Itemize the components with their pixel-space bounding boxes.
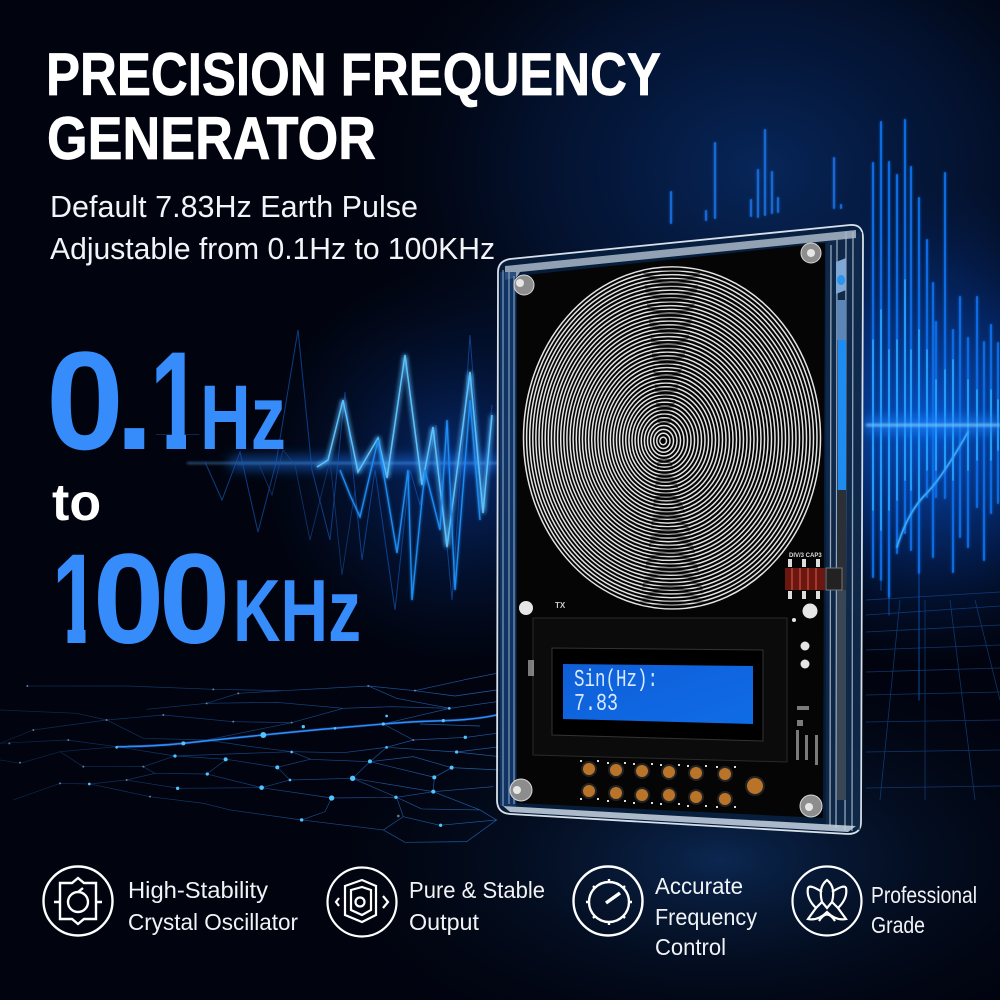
title bbox=[46, 41, 661, 172]
label bbox=[871, 882, 977, 938]
coil centre bbox=[660, 438, 666, 444]
subtitle bbox=[50, 189, 495, 266]
LCD text: Sin(Hz): bbox=[574, 667, 658, 694]
label bbox=[655, 873, 757, 960]
range value: 0.1Hz: 1 bbox=[150, 322, 202, 479]
coil moire hourglass bbox=[640, 267, 705, 608]
icon: flower bbox=[792, 866, 862, 936]
silkscreen TX: TX bbox=[555, 601, 566, 610]
title: PRECISION FREQUENCY bbox=[46, 41, 661, 108]
label: Control bbox=[655, 934, 726, 960]
range value: 100KHz: KHz bbox=[233, 561, 361, 660]
feature: professional grade bbox=[792, 866, 977, 938]
range word: to: to bbox=[52, 474, 101, 532]
label: High-Stability bbox=[128, 877, 268, 903]
label bbox=[409, 877, 545, 935]
LCD module bbox=[533, 618, 787, 762]
feature: accurate frequency control bbox=[574, 866, 757, 960]
range value: 100KHz: 1 bbox=[52, 528, 100, 671]
range value: 100KHz: 0 bbox=[159, 528, 230, 671]
LCD module: 7.83 bbox=[574, 691, 618, 718]
acrylic outer case bbox=[497, 225, 863, 834]
label bbox=[128, 877, 298, 935]
mount holes bbox=[519, 601, 818, 668]
subtitle: Default 7.83Hz Earth Pulse bbox=[50, 189, 418, 224]
right floor grid bbox=[866, 592, 1000, 800]
range value: 0.1Hz bbox=[52, 351, 284, 450]
red toroid component: DIV/3 CAP3 bbox=[789, 553, 822, 559]
right waveform bars bbox=[671, 120, 1000, 700]
icon: crystal bbox=[44, 866, 112, 936]
label: Output bbox=[409, 909, 479, 935]
feature: pure and stable output bbox=[328, 868, 545, 936]
acrylic left rim bbox=[500, 270, 516, 806]
left waveform bbox=[187, 330, 500, 610]
icon: shield chip bbox=[328, 868, 396, 936]
feature: high-stability crystal oscillator bbox=[44, 866, 298, 936]
PCB board bbox=[517, 243, 825, 818]
acrylic right edge bbox=[826, 232, 862, 831]
label: Grade bbox=[871, 912, 925, 938]
label: Accurate bbox=[655, 873, 743, 899]
icon: dial gauge bbox=[574, 866, 642, 936]
range value: 100KHz bbox=[58, 553, 359, 644]
range value: 100KHz: 0 bbox=[93, 528, 164, 671]
label: Pure & Stable bbox=[409, 877, 545, 903]
range value: 0.1Hz: 0 bbox=[46, 322, 124, 479]
red toroid component bbox=[785, 553, 842, 599]
device: acrylic case with PCB bbox=[497, 225, 863, 834]
floor network bbox=[0, 673, 500, 842]
range value: 0.1Hz: . bbox=[115, 322, 154, 479]
range value: 0.1Hz: Hz bbox=[200, 367, 286, 469]
acrylic top rim bbox=[505, 230, 856, 280]
buttons bbox=[582, 762, 764, 806]
label: Crystal Oscillator bbox=[128, 909, 298, 935]
subtitle: Adjustable from 0.1Hz to 100KHz bbox=[50, 231, 495, 266]
label: Frequency bbox=[655, 904, 757, 930]
label: Professional bbox=[871, 882, 977, 908]
spiral coil bbox=[524, 267, 820, 609]
title: GENERATOR bbox=[47, 105, 376, 172]
button solder pads bbox=[528, 660, 818, 808]
corner screws bbox=[510, 243, 822, 817]
lower acrylic lip bbox=[503, 806, 856, 832]
